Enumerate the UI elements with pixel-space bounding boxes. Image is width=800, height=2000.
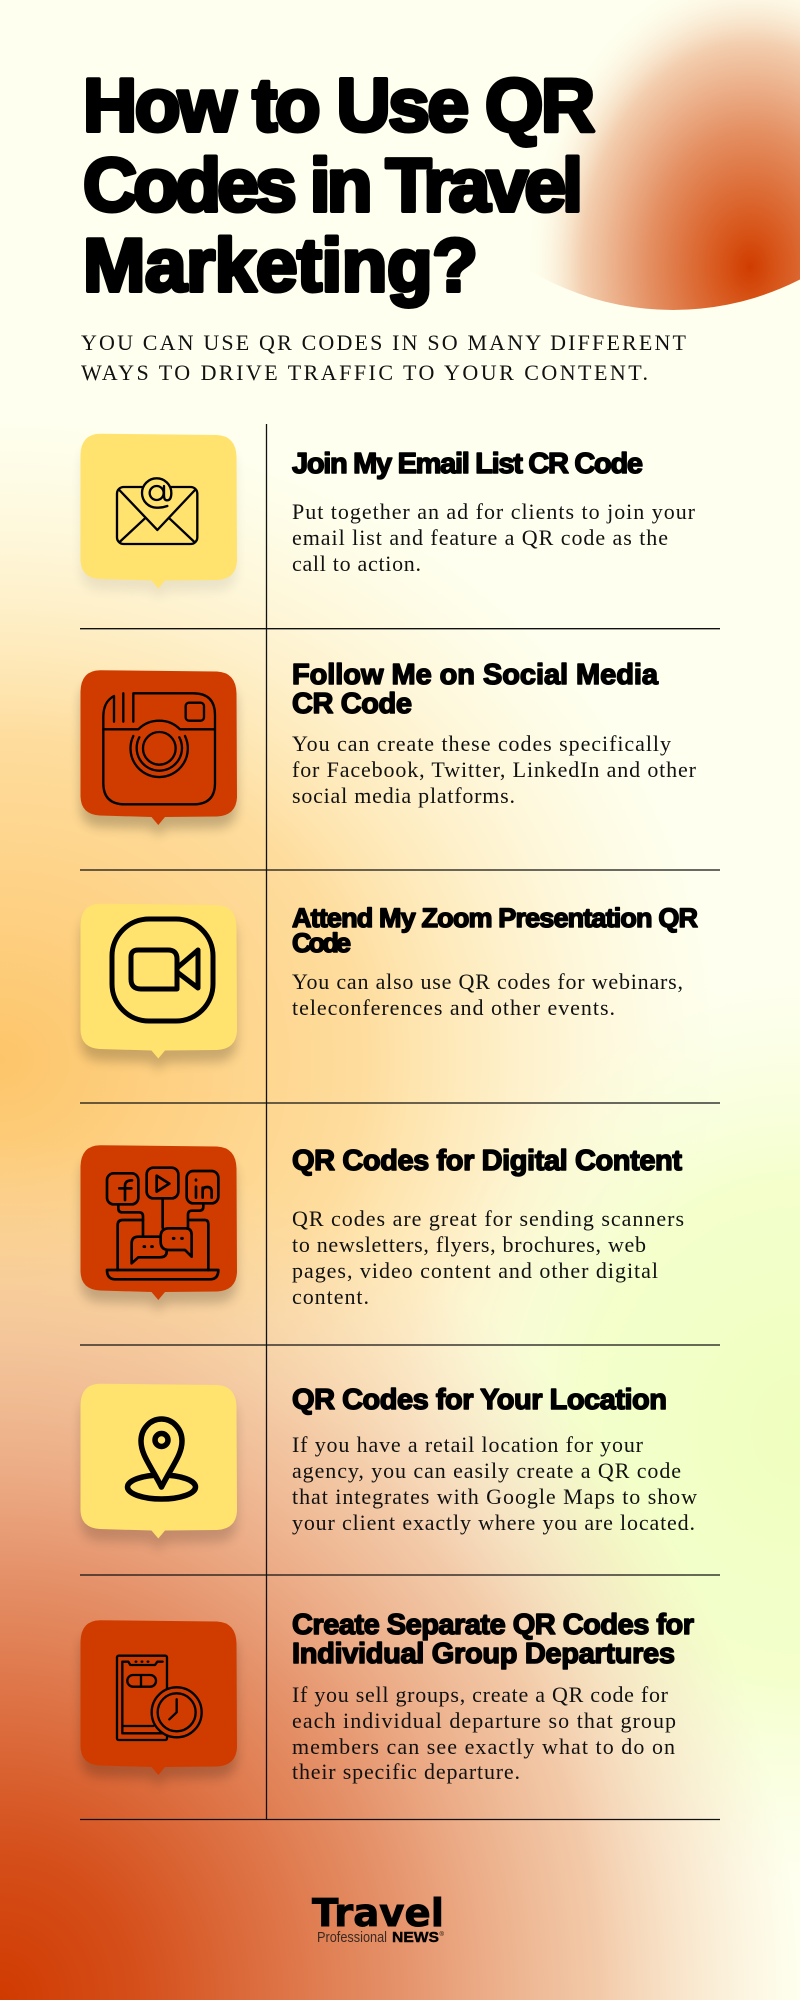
icon: social laptop speech bubble [80, 1145, 237, 1312]
panel: zoom presentation [80, 903, 698, 1070]
grid lines [80, 424, 720, 1820]
body text: pages, video content and other digital [292, 1258, 658, 1283]
panel: email list [80, 434, 696, 600]
body text [292, 1206, 684, 1309]
body text: each individual departure so that group [292, 1708, 676, 1733]
body text: their specific departure. [292, 1759, 520, 1784]
heading: QR Codes for Your Location [292, 1384, 667, 1416]
title: How to Use QR [83, 63, 595, 147]
sun gradient blob [546, 0, 800, 310]
title: Codes in Travel [83, 143, 583, 227]
panel: digital content [80, 1145, 684, 1312]
body text: your client exactly where you are located. [292, 1510, 695, 1535]
icon: camera speech bubble [80, 670, 237, 836]
body text: You can also use QR codes for webinars, [292, 969, 683, 994]
body text: for Facebook, Twitter, LinkedIn and other [292, 757, 697, 782]
heading: Create Separate QR Codes for [292, 1609, 694, 1641]
logo: Travel Professional News: NEWS [392, 1929, 439, 1946]
body text [292, 1432, 697, 1535]
heading: Attend My Zoom Presentation QR [292, 903, 698, 933]
subtitle: YOU CAN USE QR CODES IN SO MANY DIFFERENT [81, 330, 687, 355]
body text: email list and feature a QR code as the [292, 525, 668, 550]
title: Marketing? [83, 223, 478, 307]
heading: Code [292, 928, 351, 958]
body text [292, 499, 696, 576]
body text: agency, you can easily create a QR code [292, 1458, 681, 1483]
body text: social media platforms. [292, 783, 515, 808]
icon: envelope speech bubble [80, 434, 237, 600]
heading: CR Code [292, 688, 412, 720]
title [83, 63, 595, 307]
body text: that integrates with Google Maps to show [292, 1484, 697, 1509]
body text [292, 1682, 676, 1784]
icon glyph: video camera [112, 919, 213, 1021]
logo: Travel Professional News: ® [440, 1931, 444, 1938]
icon glyph: map pin [128, 1419, 196, 1499]
body text: content. [292, 1284, 369, 1309]
subtitle [81, 330, 687, 385]
body text: call to action. [292, 551, 421, 576]
body text [292, 969, 683, 1020]
icon: map pin speech bubble [80, 1384, 237, 1550]
logo: Travel Professional News: Travel [312, 1891, 444, 1935]
icon: video camera speech bubble [80, 904, 237, 1070]
body text: If you have a retail location for your [292, 1432, 644, 1457]
subtitle: WAYS TO DRIVE TRAFFIC TO YOUR CONTENT. [81, 360, 648, 385]
body text: members can see exactly what to do on [292, 1734, 675, 1759]
heading: QR Codes for Digital Content [292, 1145, 682, 1177]
body text: You can create these codes specifically [292, 731, 671, 756]
heading [292, 1609, 694, 1670]
panel: social media [80, 659, 697, 836]
body text: If you sell groups, create a QR code for [292, 1682, 669, 1707]
logo: Travel Professional News: Professional [317, 1929, 387, 1946]
heading [292, 903, 698, 958]
panel: group departures [80, 1609, 694, 1786]
body text: Put together an ad for clients to join your [292, 499, 696, 524]
panel: location [80, 1384, 697, 1550]
body text: to newsletters, flyers, brochures, web [292, 1232, 646, 1257]
heading: Follow Me on Social Media [292, 659, 659, 691]
heading [292, 659, 659, 720]
icon: phone and clock speech bubble [80, 1620, 237, 1786]
body text: teleconferences and other events. [292, 995, 615, 1020]
heading: Join My Email List CR Code [292, 448, 643, 480]
body text: QR codes are great for sending scanners [292, 1206, 684, 1231]
body text [292, 731, 697, 808]
heading: Individual Group Departures [292, 1638, 675, 1670]
